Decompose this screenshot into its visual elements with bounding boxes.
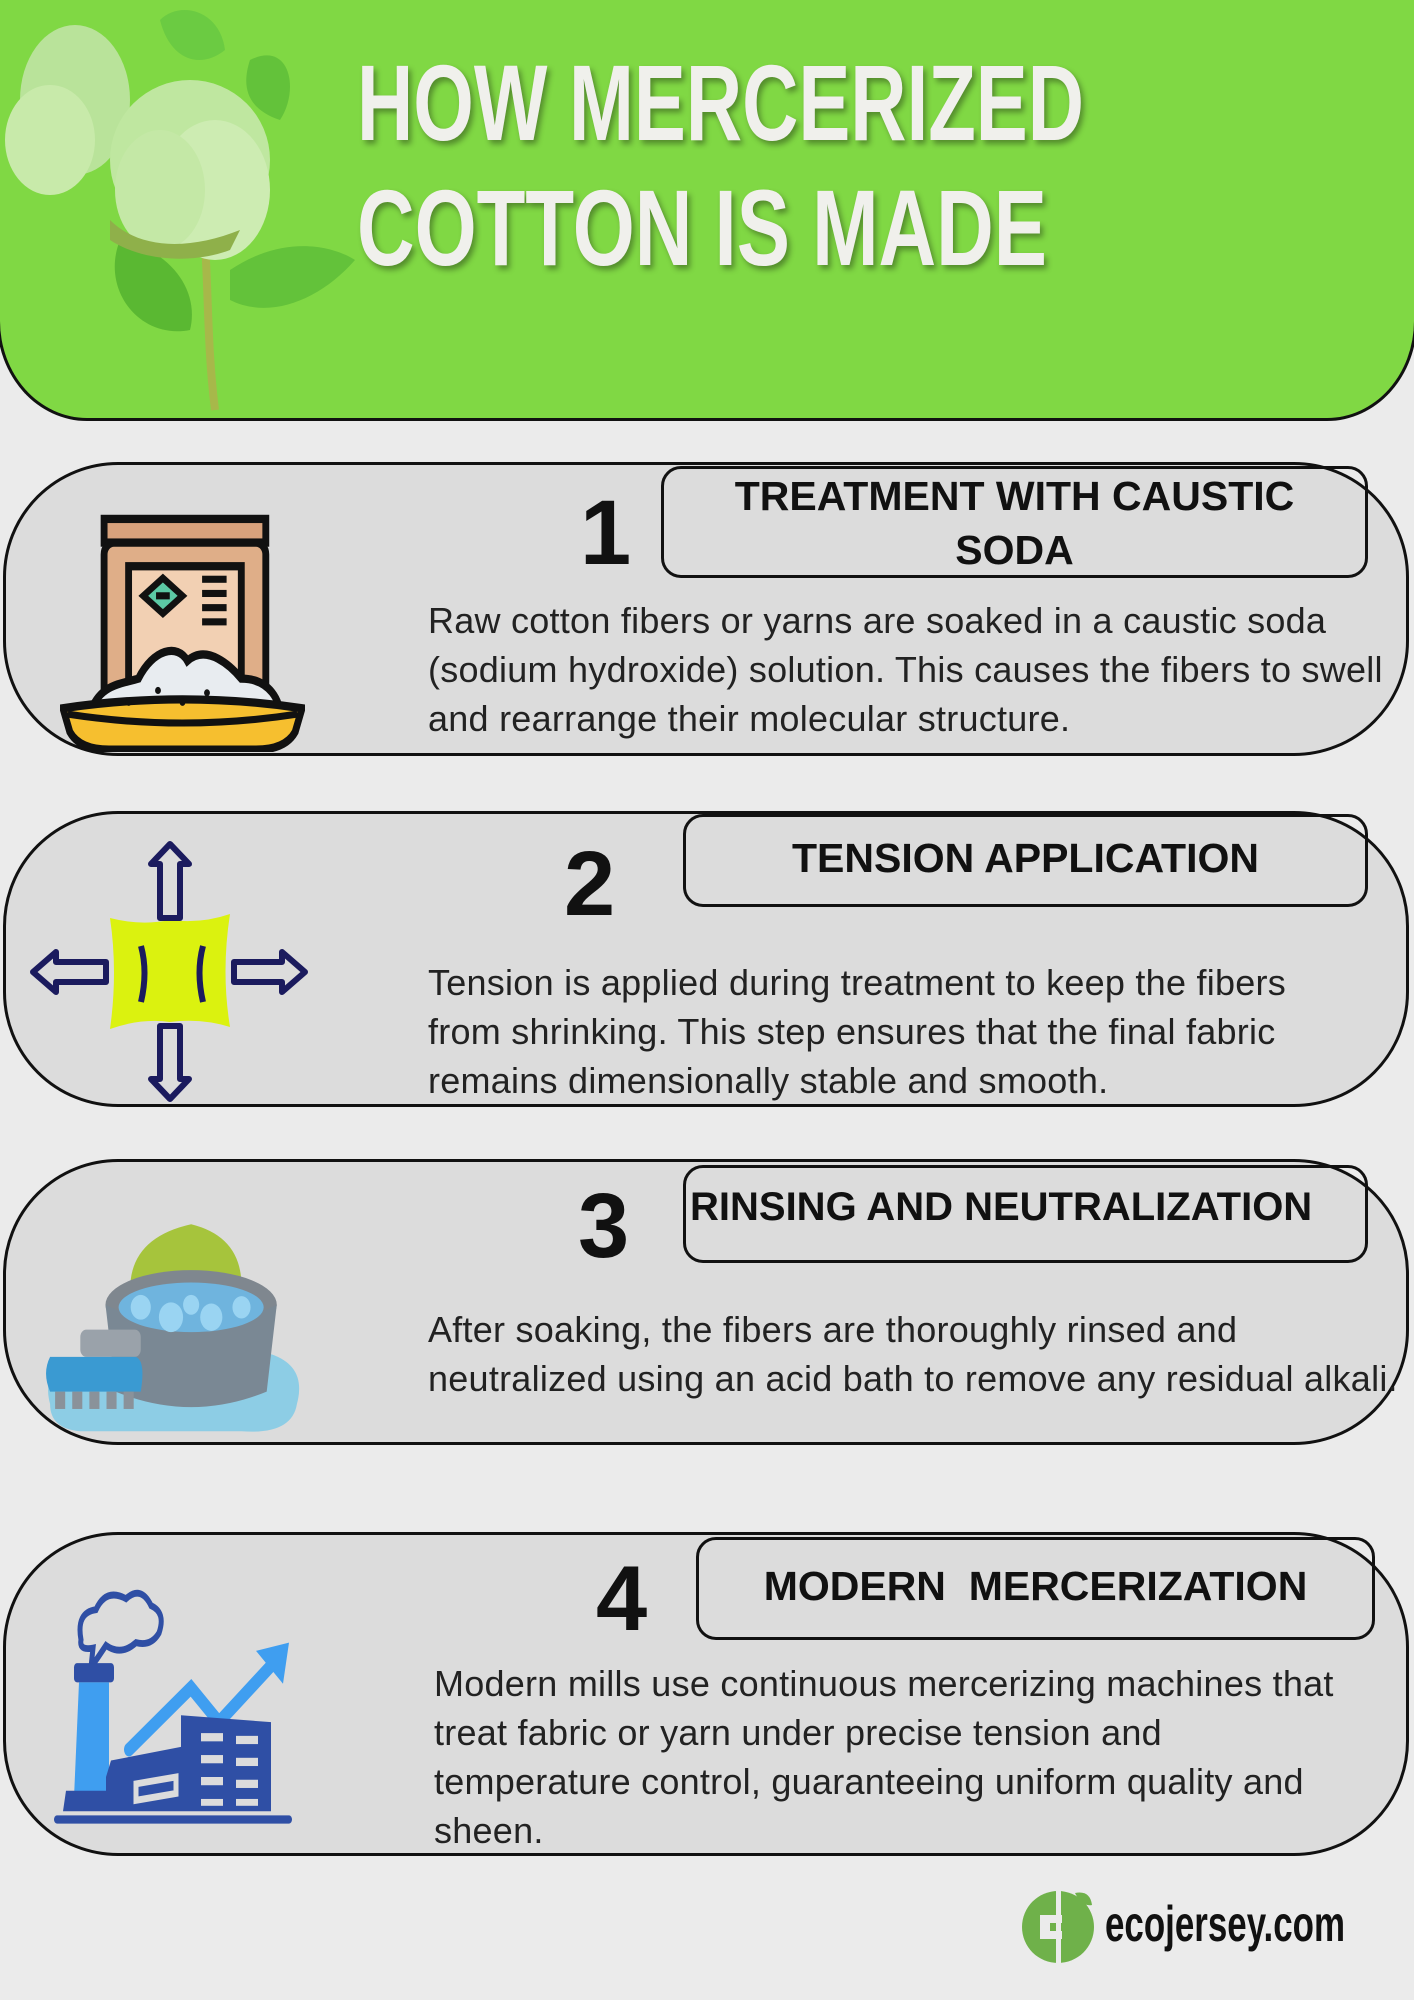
title: HOW MERCERIZED	[357, 42, 1084, 163]
icon: tension arrows	[30, 841, 308, 1102]
icon: caustic soda bag	[60, 514, 305, 752]
text: step 3 description: After soaking, the fibers are thoroughly rinsed and	[428, 1309, 1237, 1350]
text: step 2 description	[428, 962, 1286, 1101]
icon: ecojersey logo mark	[1022, 1891, 1094, 1963]
text: step 4 description: temperature control, guaranteeing uniform quality and	[434, 1761, 1304, 1802]
header banner	[0, 0, 1414, 421]
logo: ecojersey.com	[1022, 1891, 1345, 1963]
label: rinsing and neutralization	[683, 1165, 1368, 1263]
label: treatment with caustic soda	[661, 466, 1368, 578]
text: step 4 description: Modern mills use continuous mercerizing machines that	[434, 1663, 1334, 1704]
label: modern mercerization: MODERN MERCERIZATION	[764, 1563, 1307, 1609]
title: COTTON IS MADE	[357, 167, 1047, 288]
number 1: 1	[580, 482, 631, 584]
icon: cotton plant	[5, 10, 355, 410]
panel: step 2	[3, 811, 1409, 1107]
text: step 4 description: sheen.	[434, 1810, 544, 1851]
text: step 2 description: from shrinking. This step ensures that the final fabric	[428, 1011, 1275, 1052]
number 3: 3	[578, 1175, 629, 1277]
icon: factory with growth arrow	[54, 1590, 292, 1824]
label: tension application: TENSION APPLICATION	[792, 835, 1259, 881]
label: treatment with caustic soda: SODA	[955, 527, 1074, 573]
icon: wash tub with garment	[46, 1224, 300, 1432]
text: step 1 description: and rearrange their molecular structure.	[428, 698, 1070, 739]
panel: step 3	[3, 1159, 1409, 1445]
text: step 1 description	[428, 600, 1383, 739]
title	[357, 42, 1087, 288]
text: step 3 description: neutralized using an acid bath to remove any residual alkali.	[428, 1358, 1398, 1399]
text: step 4 description	[434, 1663, 1334, 1851]
panel: step 4	[3, 1532, 1409, 1856]
label: tension application	[683, 814, 1368, 907]
text: step 1 description: Raw cotton fibers or yarns are soaked in a caustic soda	[428, 600, 1326, 641]
number 4: 4	[596, 1548, 647, 1650]
panel: step 1	[3, 462, 1409, 756]
text: step 3 description	[428, 1309, 1398, 1399]
number 2: 2	[564, 833, 615, 935]
text: step 4 description: treat fabric or yarn under precise tension and	[434, 1712, 1162, 1753]
label: rinsing and neutralization: RINSING AND NEUTRALIZATION	[690, 1185, 1312, 1229]
label: modern mercerization	[696, 1537, 1375, 1640]
label: treatment with caustic soda: TREATMENT WITH CAUSTIC	[735, 473, 1294, 519]
text: step 2 description: Tension is applied during treatment to keep the fibers	[428, 962, 1286, 1003]
text: step 2 description: remains dimensionally stable and smooth.	[428, 1060, 1108, 1101]
text: step 1 description: (sodium hydroxide) solution. This causes the fibers to swell	[428, 649, 1383, 690]
